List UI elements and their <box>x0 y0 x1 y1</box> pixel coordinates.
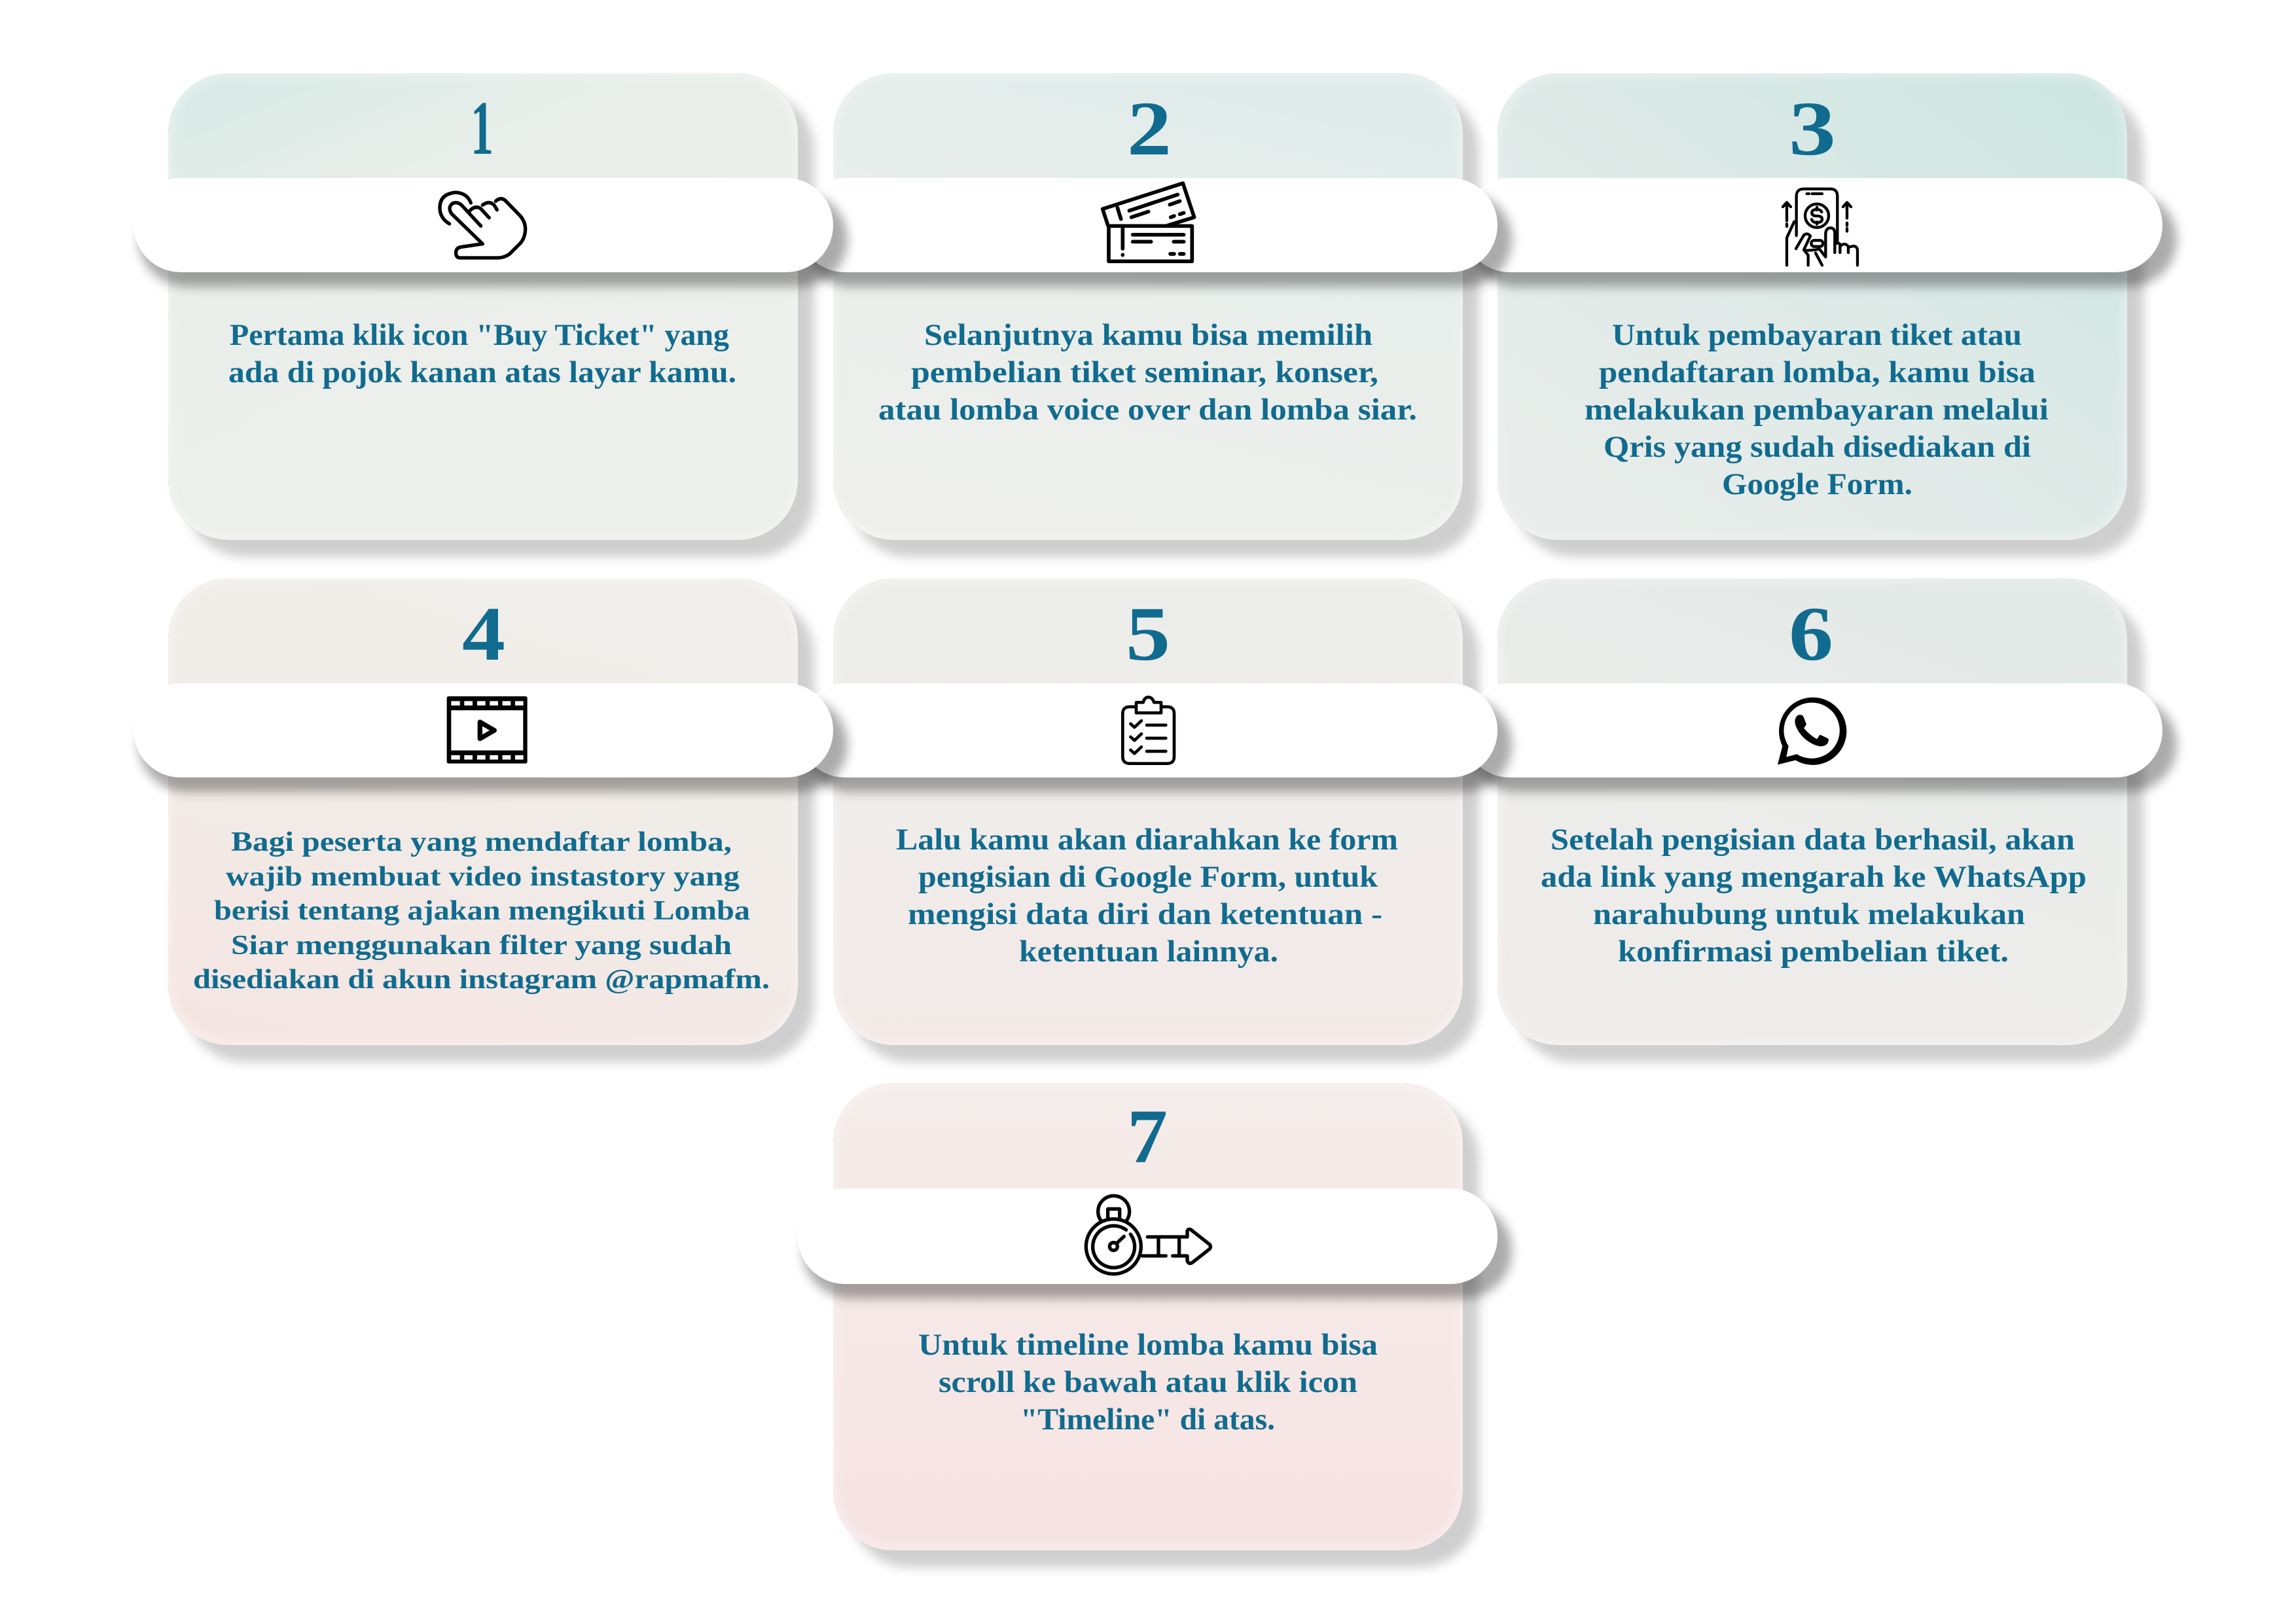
panel: card 5 <box>833 579 1463 1045</box>
text block: card 2: atau lomba voice over dan lomba siar. <box>878 393 1417 427</box>
number 6: 6 <box>1789 591 1833 677</box>
icon: clipboard checklist <box>1122 697 1174 764</box>
text block: card 1 <box>228 318 736 389</box>
text block: card 7: scroll ke bawah atau klik icon <box>939 1365 1357 1399</box>
panel: card 1 <box>168 73 798 540</box>
white band: card 3 <box>1463 178 2177 287</box>
panel: card 3 <box>1498 73 2127 540</box>
number 3: 3 <box>1789 86 1836 171</box>
text block: card 7 <box>918 1328 1378 1436</box>
text block: card 4: wajib membuat video instastory yang <box>226 862 740 892</box>
icon: tickets <box>1103 183 1194 261</box>
text block: card 3: Google Form. <box>1722 467 1912 501</box>
text block: card 4: berisi tentang ajakan mengikuti Lomba <box>214 896 750 926</box>
text block: card 6 <box>1541 823 2087 969</box>
text block: card 2: Selanjutnya kamu bisa memilih <box>924 318 1372 352</box>
text block: card 3: pendaftaran lomba, kamu bisa <box>1599 355 2036 389</box>
text block: card 5: pengisian di Google Form, untuk <box>918 860 1378 894</box>
text block: card 6: narahubung untuk melakukan <box>1593 897 2025 931</box>
text block: card 3: Untuk pembayaran tiket atau <box>1612 318 2022 352</box>
icon: stopwatch with arrow <box>1086 1196 1210 1274</box>
white band: card 4 <box>134 683 848 792</box>
text block: card 3: melakukan pembayaran melalui <box>1585 393 2049 427</box>
text block: card 5: ketentuan lainnya. <box>1019 935 1278 969</box>
panel: card 2 <box>833 73 1463 540</box>
text block: card 4: disediakan di akun instagram @rapmafm. <box>193 965 770 995</box>
panel: card 6 <box>1498 579 2127 1045</box>
panel: card 7 <box>833 1083 1463 1550</box>
text block: card 1: Pertama klik icon "Buy Ticket" yang <box>230 318 729 352</box>
white band: card 5 <box>798 683 1512 792</box>
text block: card 6: ada link yang mengarah ke WhatsApp <box>1541 860 2087 894</box>
text block: card 5: mengisi data diri dan ketentuan - <box>908 897 1382 931</box>
text block: card 4: Bagi peserta yang mendaftar lomba, <box>231 827 732 857</box>
text block: card 2 <box>878 318 1417 427</box>
white band: card 7 <box>798 1188 1512 1298</box>
white band: card 2 <box>798 178 1512 287</box>
icon: pointing hand <box>440 192 526 258</box>
number 2: 2 <box>1127 86 1172 171</box>
icon: whatsapp <box>1778 698 1846 765</box>
icon: mobile payment <box>1783 189 1857 265</box>
number 7: 7 <box>1127 1094 1168 1179</box>
text block: card 1: ada di pojok kanan atas layar kamu. <box>228 355 736 389</box>
text block: card 6: konfirmasi pembelian tiket. <box>1618 935 2009 969</box>
text block: card 5: Lalu kamu akan diarahkan ke form <box>896 823 1398 857</box>
text block: card 7: Untuk timeline lomba kamu bisa <box>918 1328 1378 1362</box>
text block: card 6: Setelah pengisian data berhasil, akan <box>1551 823 2075 857</box>
text block: card 4: Siar menggunakan filter yang sudah <box>231 931 732 961</box>
icon: video film strip <box>447 696 528 764</box>
panel: card 4 <box>168 579 798 1045</box>
white band: card 1 <box>134 178 848 287</box>
number 1: 1 <box>471 85 493 171</box>
text block: card 5 <box>896 823 1398 969</box>
text block: card 4 <box>193 827 770 995</box>
text block: card 3 <box>1585 318 2049 501</box>
number 4: 4 <box>462 591 505 677</box>
white band: card 6 <box>1463 683 2177 792</box>
text block: card 3: Qris yang sudah disediakan di <box>1604 430 2031 464</box>
number 5: 5 <box>1126 591 1170 677</box>
text block: card 2: pembelian tiket seminar, konser, <box>911 355 1378 389</box>
text block: card 7: "Timeline" di atas. <box>1020 1402 1275 1436</box>
